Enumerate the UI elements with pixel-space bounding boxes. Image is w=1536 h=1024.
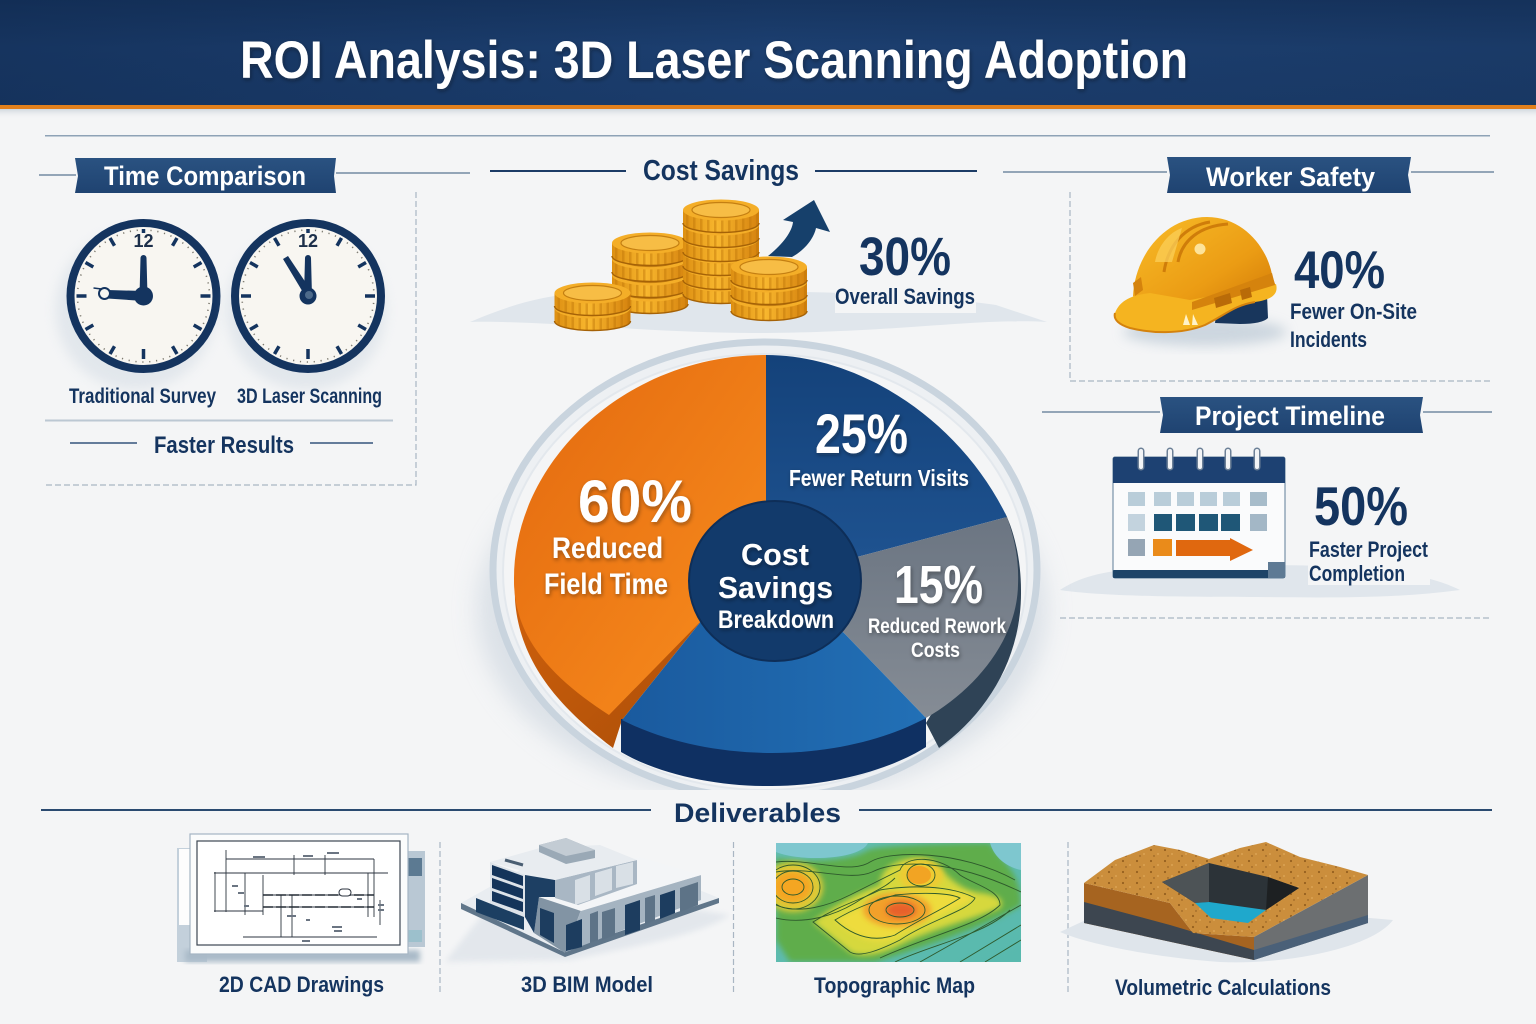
icon: 3D BIM model [445,838,730,962]
panel: time comparison [39,158,470,485]
label: 25% fewer return visits: Fewer Return Visits [789,465,969,491]
label: faster project completion [1309,537,1429,586]
title: ROI Analysis: 3D Laser Scanning Adoption [240,31,1188,90]
label: 15% reduced rework costs: Reduced Rework [868,615,1006,638]
label: 2D CAD drawings: 2D CAD Drawings [219,972,384,997]
label: traditional survey: Traditional Survey [69,385,216,408]
icon: 3D laser scanning clock [226,223,386,390]
hub: cost savings breakdown: Cost [741,537,809,572]
icon: 3D laser scanning clock: 12 [298,231,318,251]
icon: coin stacks [554,200,830,330]
segment: 60% reduced field time [514,355,766,715]
hub: cost savings breakdown [689,501,861,661]
panel: worker safety [1003,157,1494,381]
label: volumetric calculations: Volumetric Calculations [1115,975,1331,1000]
segment: 25% fewer return visits [766,355,1007,581]
segment: unlabelled lower blue [622,581,926,753]
label: fewer on-site incidents: Incidents [1290,327,1367,352]
icon: calendar [1113,451,1285,578]
hub: cost savings breakdown: Breakdown [718,606,834,634]
label: 15% reduced rework costs: Costs [911,639,960,662]
caption: faster results: Faster Results [154,432,294,459]
label: faster project completion: Completion [1309,561,1405,586]
icon: traditional survey clock [56,223,216,390]
icon: hard hat [1115,217,1277,332]
stat: 40%: 40% [1294,241,1385,300]
label: 15% reduced rework costs: 15% [894,555,983,615]
chart: cost savings breakdown pie [470,342,1070,830]
label: 60% reduced field time: Reduced [552,532,663,565]
heading: project timeline [1160,397,1423,433]
label: 15% reduced rework costs [868,555,1006,662]
segment: 15% reduced rework costs [775,517,1018,718]
label: 25% fewer return visits [789,402,969,491]
icon: volumetric calculations [1060,842,1393,962]
segment side walls [514,513,1021,786]
heading: time comparison: Time Comparison [104,161,306,191]
header banner [0,0,1536,119]
icon: 2D CAD drawings [177,834,425,962]
icon: topographic map [763,843,1021,962]
label: 60% reduced field time [544,468,692,601]
label: fewer on-site incidents: Fewer On-Site [1290,299,1417,324]
label: 25% fewer return visits: 25% [815,402,908,465]
label: overall savings: Overall Savings [835,284,975,309]
hub: cost savings breakdown: Savings [718,570,833,605]
panel: project timeline [1042,397,1492,618]
label: faster project completion: Faster Project [1309,537,1429,562]
heading: worker safety: Worker Safety [1206,162,1375,192]
icon: traditional survey clock: 12 [133,231,154,251]
label: 60% reduced field time: 60% [578,468,692,535]
label: topographic map: Topographic Map [814,973,975,998]
stat: 30%: 30% [859,227,951,287]
heading: cost savings: Cost Savings [643,155,799,187]
icon: rising arrow [768,200,830,257]
stat: 50%: 50% [1314,475,1408,537]
heading: project timeline: Project Timeline [1195,401,1385,431]
label: 3D laser scanning: 3D Laser Scanning [237,385,382,408]
panel: deliverables [41,798,1492,1000]
heading: deliverables: Deliverables [674,798,841,828]
label: 3D BIM model: 3D BIM Model [521,972,653,997]
label: 60% reduced field time: Field Time [544,568,668,601]
heading: worker safety [1167,157,1411,193]
panel: cost savings [470,155,1047,333]
label: fewer on-site incidents [1290,299,1417,352]
